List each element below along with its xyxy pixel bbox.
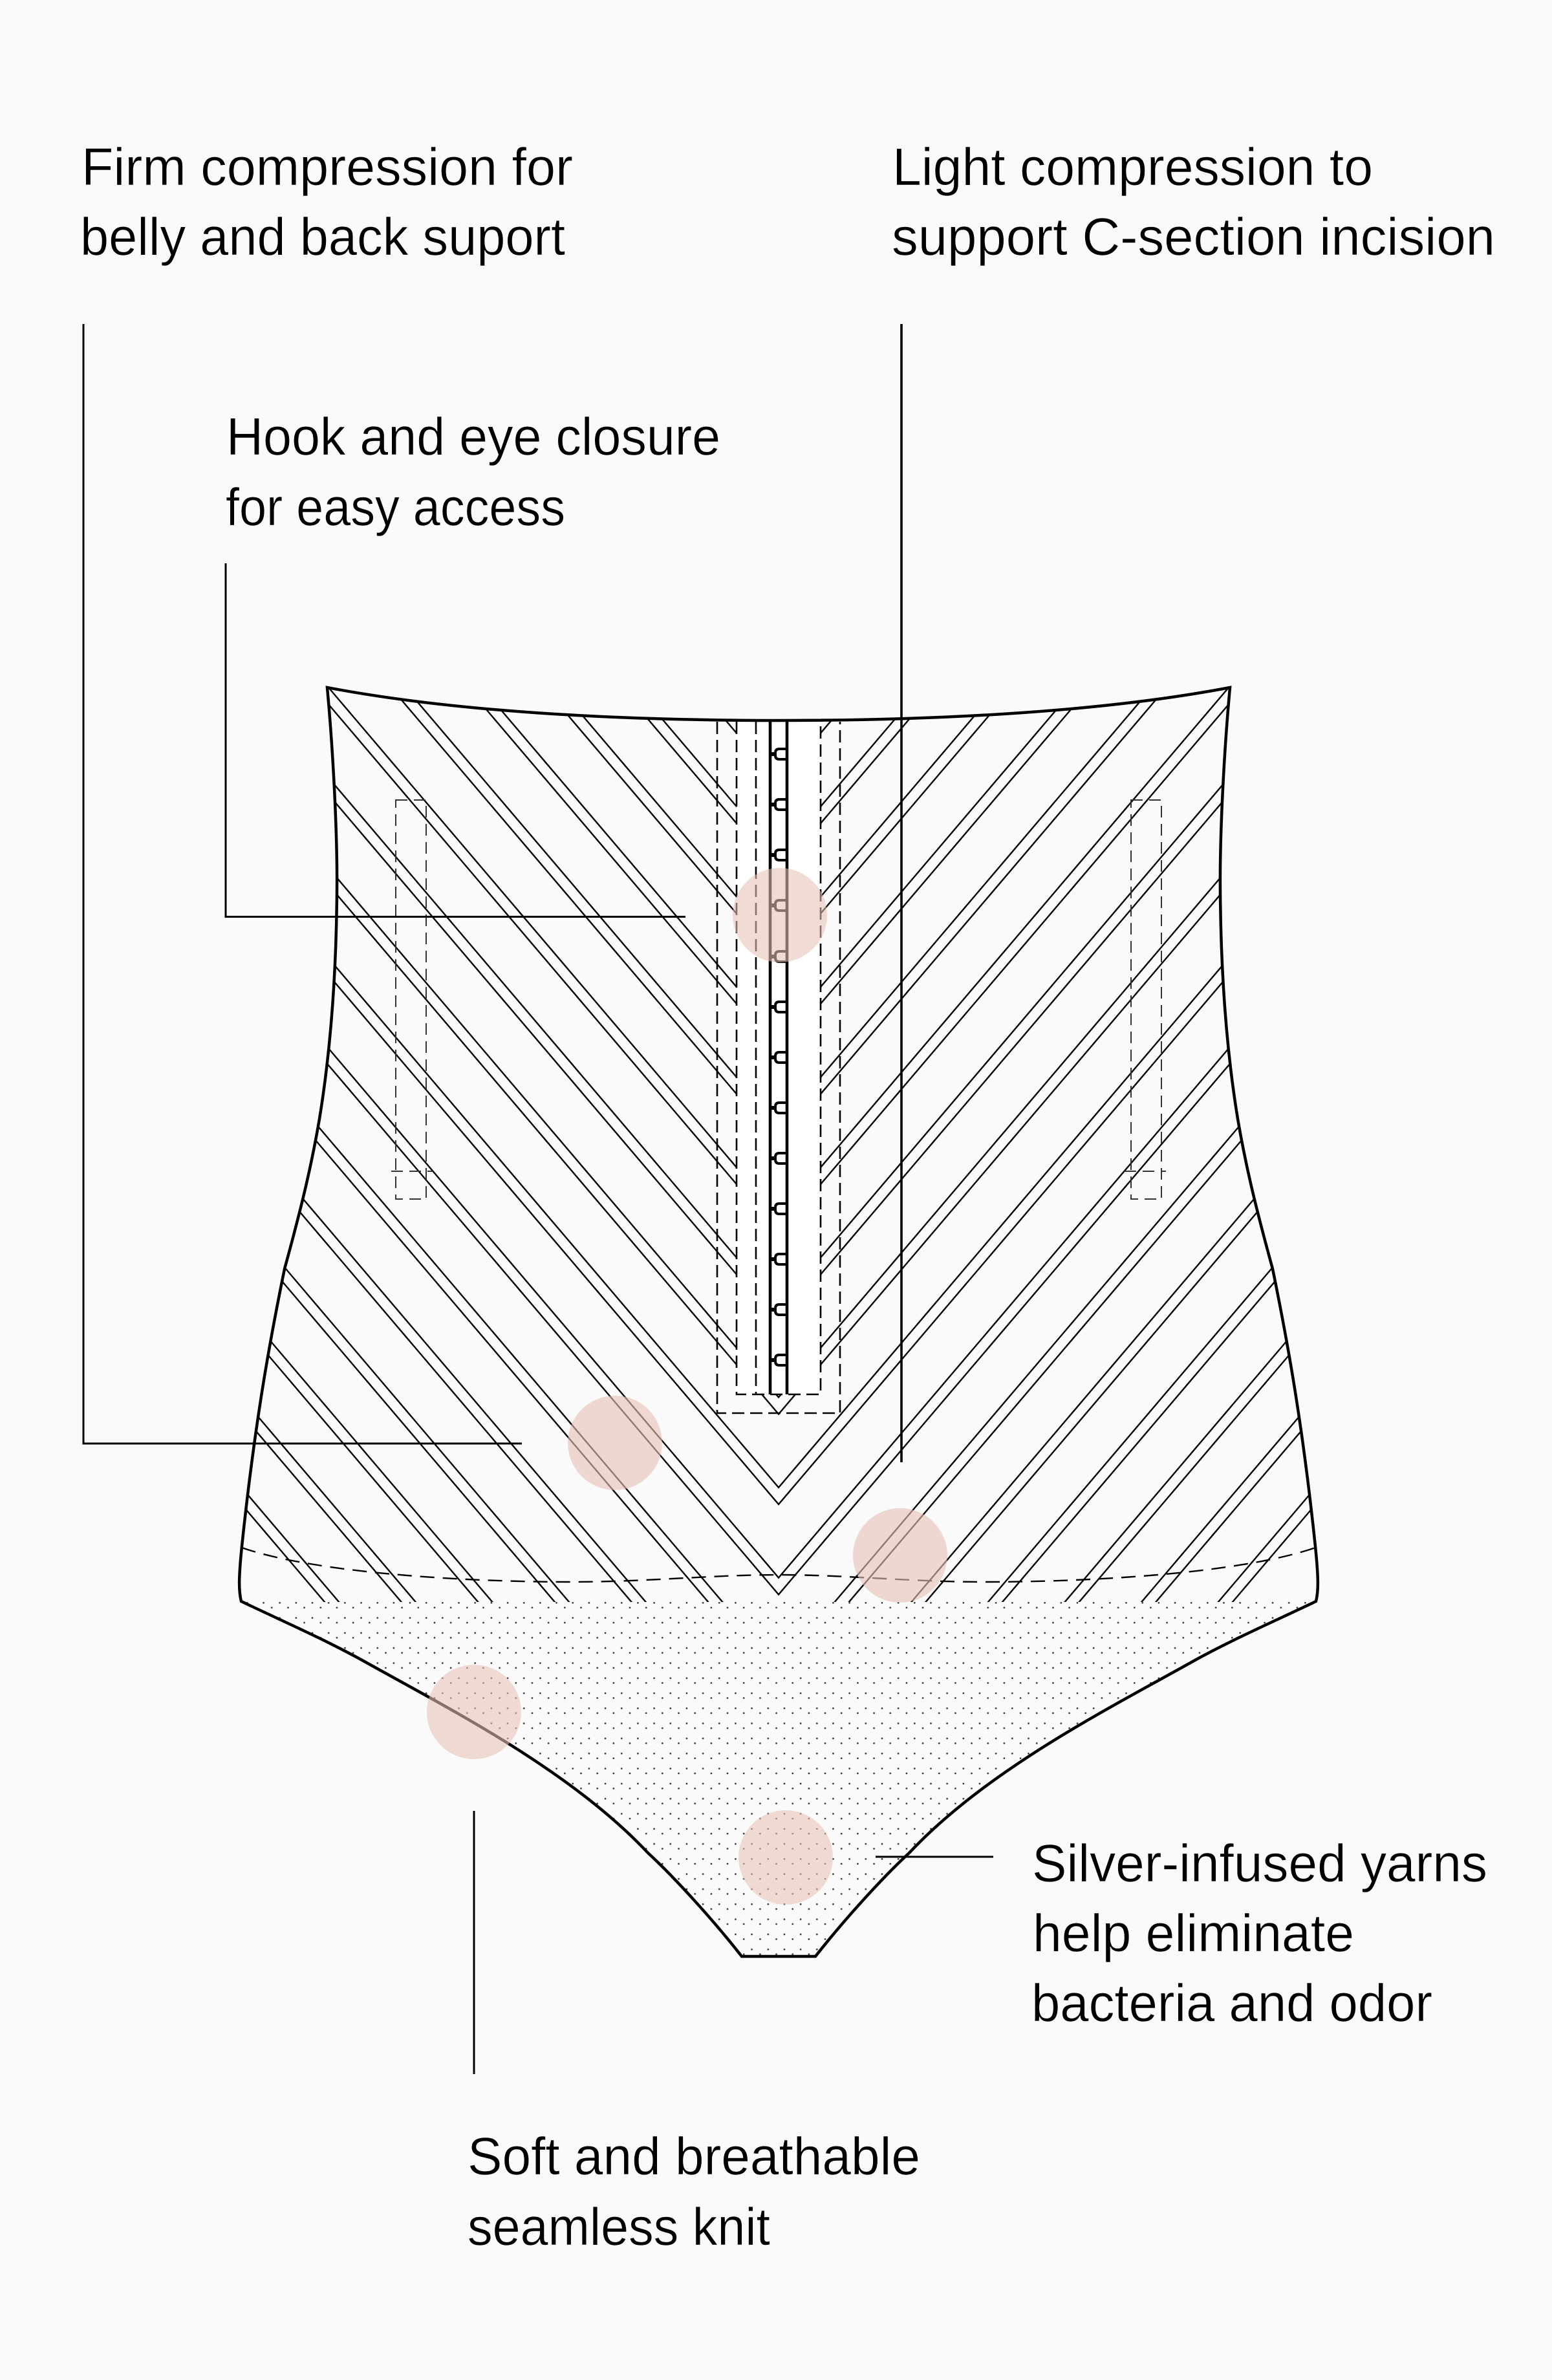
leader line: silver yarns xyxy=(876,1856,993,1857)
text: firm compression: Firm compression for xyxy=(81,138,573,197)
right dashed side panel xyxy=(1125,800,1166,1199)
text: hook and eye closure: for easy access xyxy=(226,478,565,537)
text: hook and eye closure xyxy=(226,407,720,537)
hook stubs xyxy=(771,754,775,1360)
leader line: light compression xyxy=(900,324,903,1462)
text: soft and breathable: seamless knit xyxy=(468,2198,770,2256)
text: soft and breathable: Soft and breathable xyxy=(468,2127,920,2186)
text: firm compression xyxy=(80,138,573,266)
text: silver-infused yarns xyxy=(1031,1834,1487,2033)
leader line: firm compression xyxy=(83,324,522,1444)
marker: silver-infused yarns xyxy=(738,1810,833,1905)
text: silver-infused yarns: Silver-infused yarns xyxy=(1032,1834,1487,1893)
left dashed side panel xyxy=(391,800,433,1199)
marker: firm compression xyxy=(568,1396,662,1490)
dotted knit fabric area xyxy=(241,1602,1316,1958)
dashed waist hem seam xyxy=(242,1548,1315,1582)
dashed stitching around placket xyxy=(717,722,840,1413)
marker: hook and eye closure xyxy=(733,868,827,962)
text: hook and eye closure: Hook and eye closure xyxy=(226,407,720,466)
garment illustration xyxy=(238,686,1319,1958)
garment outline xyxy=(239,687,1318,1956)
marker: light compression xyxy=(853,1508,947,1603)
closure bars xyxy=(770,720,787,1394)
hooks xyxy=(775,749,787,1365)
text: light compression: support C-section incision xyxy=(892,208,1495,266)
text: firm compression: belly and back suport xyxy=(80,208,565,266)
leader line: soft knit xyxy=(473,1811,475,2074)
text: soft and breathable xyxy=(468,2127,920,2256)
white center placket panel xyxy=(737,721,821,1394)
text: light compression xyxy=(892,138,1495,266)
text: silver-infused yarns: bacteria and odor xyxy=(1031,1974,1432,2033)
hook and eye closure xyxy=(770,720,787,1394)
text: light compression: Light compression to xyxy=(892,138,1373,197)
leader line: hook and eye xyxy=(226,563,685,917)
marker: soft seamless knit xyxy=(427,1665,521,1759)
diagonal chevron compression seams xyxy=(247,689,1310,1602)
text: silver-infused yarns: help eliminate xyxy=(1033,1904,1354,1963)
